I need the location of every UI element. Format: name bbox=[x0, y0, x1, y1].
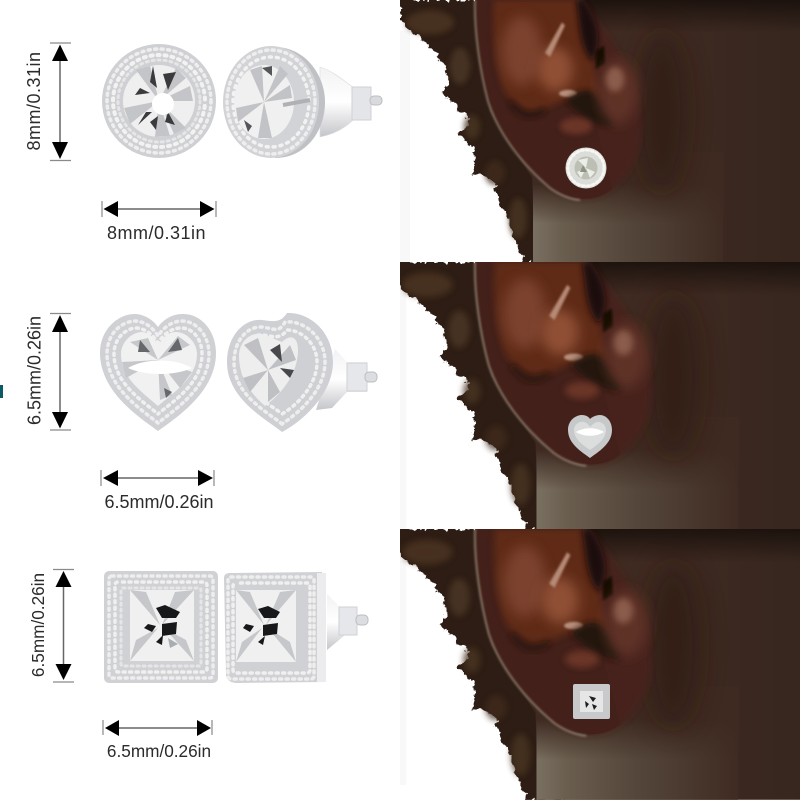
earring: square side view bbox=[224, 572, 368, 683]
photo: ear scene three bbox=[400, 529, 800, 800]
vertical label: 6.5mm/0.26in: 6.5mm/0.26in bbox=[28, 573, 48, 677]
horizontal dimension arrow: 6.5mm bbox=[103, 720, 212, 736]
photo: ear scene two bbox=[400, 262, 800, 529]
earring: heart side view bbox=[227, 313, 377, 432]
teal edge mark bbox=[0, 385, 3, 398]
panel: heart stud size guide bbox=[24, 313, 377, 512]
earring: round side view bbox=[223, 46, 382, 158]
earring: square front view bbox=[104, 571, 218, 683]
panel: round stud size guide bbox=[24, 43, 382, 243]
earring worn: round bbox=[566, 148, 606, 188]
horizontal dimension arrow: 6.5mm bbox=[101, 470, 214, 486]
vertical dimension arrow: 6.5mm bbox=[50, 314, 71, 430]
panel: square stud size guide bbox=[28, 570, 368, 761]
vertical dimension arrow: 8mm bbox=[50, 43, 71, 160]
photo: ear scene one bbox=[400, 0, 800, 262]
earring: heart front view bbox=[100, 314, 216, 431]
panel: ear photo with round stud bbox=[400, 0, 800, 262]
horizontal dimension arrow: 8mm bbox=[102, 201, 216, 217]
panel: ear photo with square stud bbox=[396, 529, 800, 800]
white strip below photo bbox=[400, 785, 412, 800]
vertical label: 8mm/0.31in: 8mm/0.31in bbox=[24, 51, 44, 151]
earring worn: square bbox=[573, 684, 610, 719]
panel: ear photo with heart stud bbox=[396, 262, 800, 529]
vertical dimension arrow: 6.5mm bbox=[53, 570, 74, 682]
vertical label: 6.5mm/0.26in: 6.5mm/0.26in bbox=[24, 316, 44, 425]
earring worn: heart bbox=[568, 415, 612, 458]
horizontal label: 6.5mm/0.26in: 6.5mm/0.26in bbox=[107, 741, 211, 761]
horizontal label: 8mm/0.31in: 8mm/0.31in bbox=[107, 223, 206, 243]
horizontal label: 6.5mm/0.26in: 6.5mm/0.26in bbox=[104, 492, 214, 512]
earring: round front view bbox=[102, 44, 216, 158]
